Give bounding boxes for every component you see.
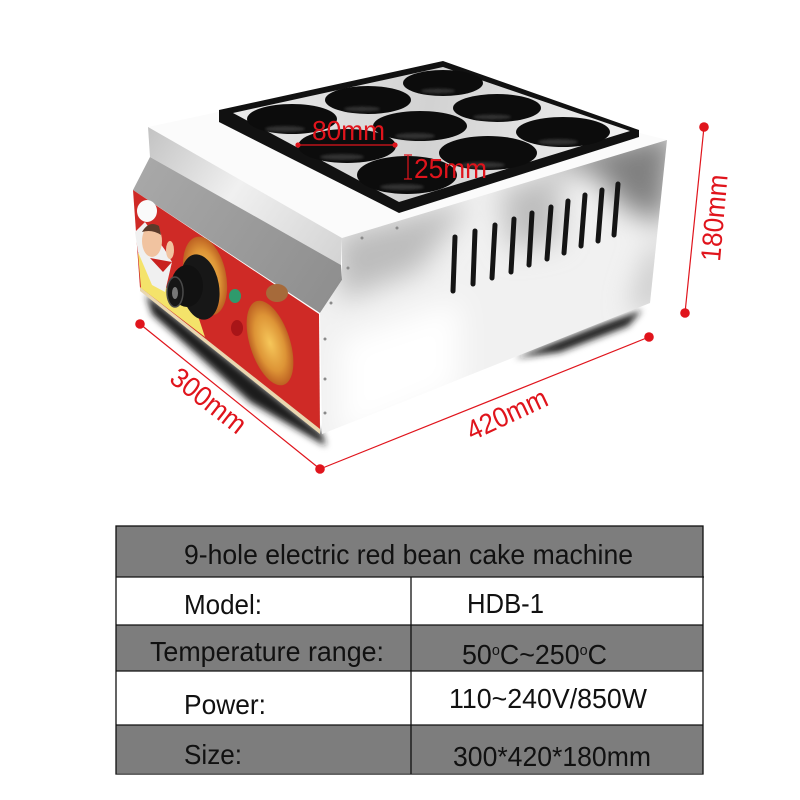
row: temperature range: o [492, 642, 500, 659]
vent slots [453, 184, 618, 291]
row: temperature range: C [588, 639, 607, 670]
dimension: 300mm depth: 300mm [164, 361, 253, 440]
cake illustrations [176, 233, 234, 319]
row: power: Power: [184, 689, 266, 720]
yellow corner [138, 253, 205, 337]
dimension: 420mm width [320, 332, 654, 469]
temperature dial [167, 251, 224, 323]
row: power [184, 683, 648, 720]
dimension: 25mm hole depth: 25mm [414, 153, 487, 184]
red lamp [231, 320, 243, 336]
row: size [184, 739, 651, 772]
screws [324, 226, 398, 414]
dimension: 420mm width: 420mm [461, 382, 552, 446]
shadow under machine [146, 294, 642, 446]
row: size: Size: [184, 739, 242, 770]
green switch [229, 289, 241, 303]
row: size: 300*420*180mm [453, 741, 651, 772]
row: temperature range: 50 [462, 639, 493, 670]
specification table [116, 526, 704, 774]
cream edge [140, 287, 320, 434]
row: power: 110~240V/850W [449, 683, 648, 714]
table title: 9-hole electric red bean cake machine [184, 539, 633, 570]
row: temperature range: C~250 [500, 639, 580, 670]
row: temperature range: o [580, 642, 588, 659]
red front control panel [133, 190, 320, 434]
front fold strip [148, 127, 342, 265]
chef illustration [135, 200, 174, 292]
row: temperature range [150, 636, 607, 670]
hole highlights [265, 88, 578, 190]
side panel with vents [320, 130, 675, 440]
dimension: 180mm height [680, 122, 734, 318]
row: model: HDB-1 [467, 588, 544, 619]
table grid lines [116, 526, 704, 774]
row: temperature range: Temperature range: [150, 636, 384, 667]
dimension: 80mm hole diameter: 80mm [312, 115, 385, 146]
dimension: 300mm depth [135, 319, 325, 474]
dimension: 180mm height: 180mm [695, 173, 734, 263]
row: model [184, 588, 544, 620]
row: model: Model: [184, 589, 262, 620]
top plate [148, 112, 667, 238]
metal shading [332, 140, 667, 422]
holes [247, 70, 610, 194]
griddle tray with nine holes [219, 61, 639, 213]
table row backgrounds [116, 526, 703, 773]
grey sloped panel [133, 157, 342, 313]
machine photo [133, 61, 675, 446]
